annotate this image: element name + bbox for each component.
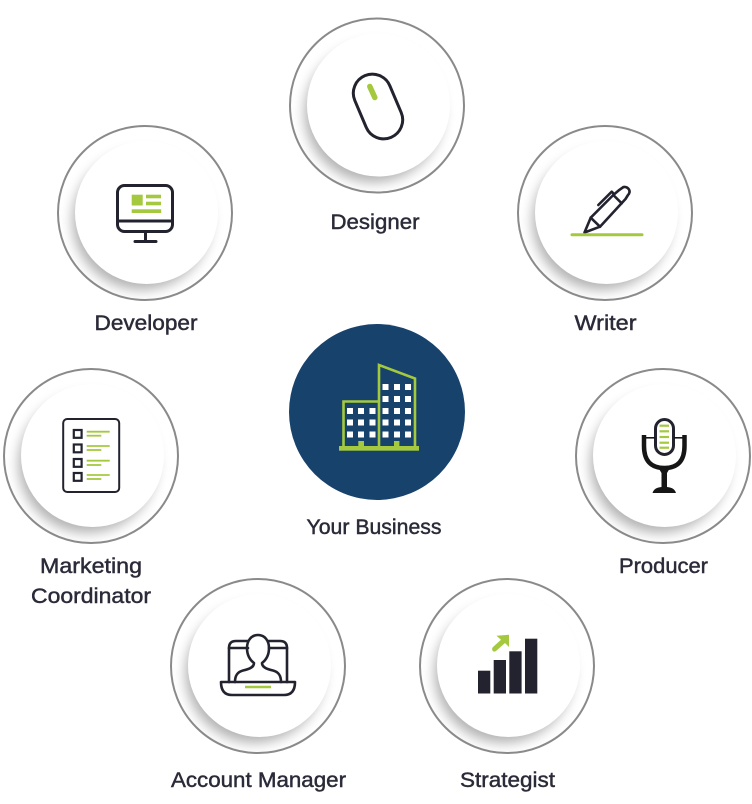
- icon: microphone: [644, 420, 684, 493]
- label: Marketing Coordinator: Marketing: [40, 554, 142, 578]
- node: Account Manager: [171, 579, 346, 792]
- circle: Marketing Coordinator: [4, 369, 178, 543]
- circle: Developer: [58, 126, 232, 300]
- circle: Writer: [518, 126, 692, 300]
- icon: pen: [572, 187, 642, 235]
- node: Your Business: [289, 324, 465, 539]
- icon: growth chart: [478, 635, 537, 694]
- circle: Strategist: [420, 579, 594, 753]
- node: Producer: [576, 369, 750, 578]
- label: Marketing Coordinator: [31, 554, 151, 608]
- label: Developer: Developer: [94, 311, 198, 335]
- label: Producer: Producer: [619, 554, 708, 578]
- label: Designer: Designer: [330, 210, 420, 234]
- node: Developer: [58, 126, 232, 335]
- circle: Producer: [576, 369, 750, 543]
- label: Strategist: Strategist: [460, 768, 555, 792]
- icon: monitor: [118, 186, 172, 242]
- icon: laptop with person: [221, 635, 295, 695]
- label: Writer: Writer: [574, 311, 636, 335]
- label: Account Manager: Account Manager: [171, 768, 346, 792]
- node: Writer: [518, 126, 692, 335]
- node: Marketing Coordinator: [4, 369, 178, 608]
- node: Designer: [290, 18, 464, 234]
- node: Strategist: [420, 579, 594, 792]
- circle: Your Business: [289, 324, 465, 500]
- label: Marketing Coordinator: Coordinator: [31, 584, 151, 608]
- circle: Account Manager: [171, 579, 345, 753]
- label: Your Business: Your Business: [306, 515, 442, 539]
- circle: Designer: [290, 18, 464, 192]
- icon: checklist: [63, 419, 119, 492]
- icon: mouse: [347, 68, 409, 145]
- icon: buildings: [339, 365, 419, 451]
